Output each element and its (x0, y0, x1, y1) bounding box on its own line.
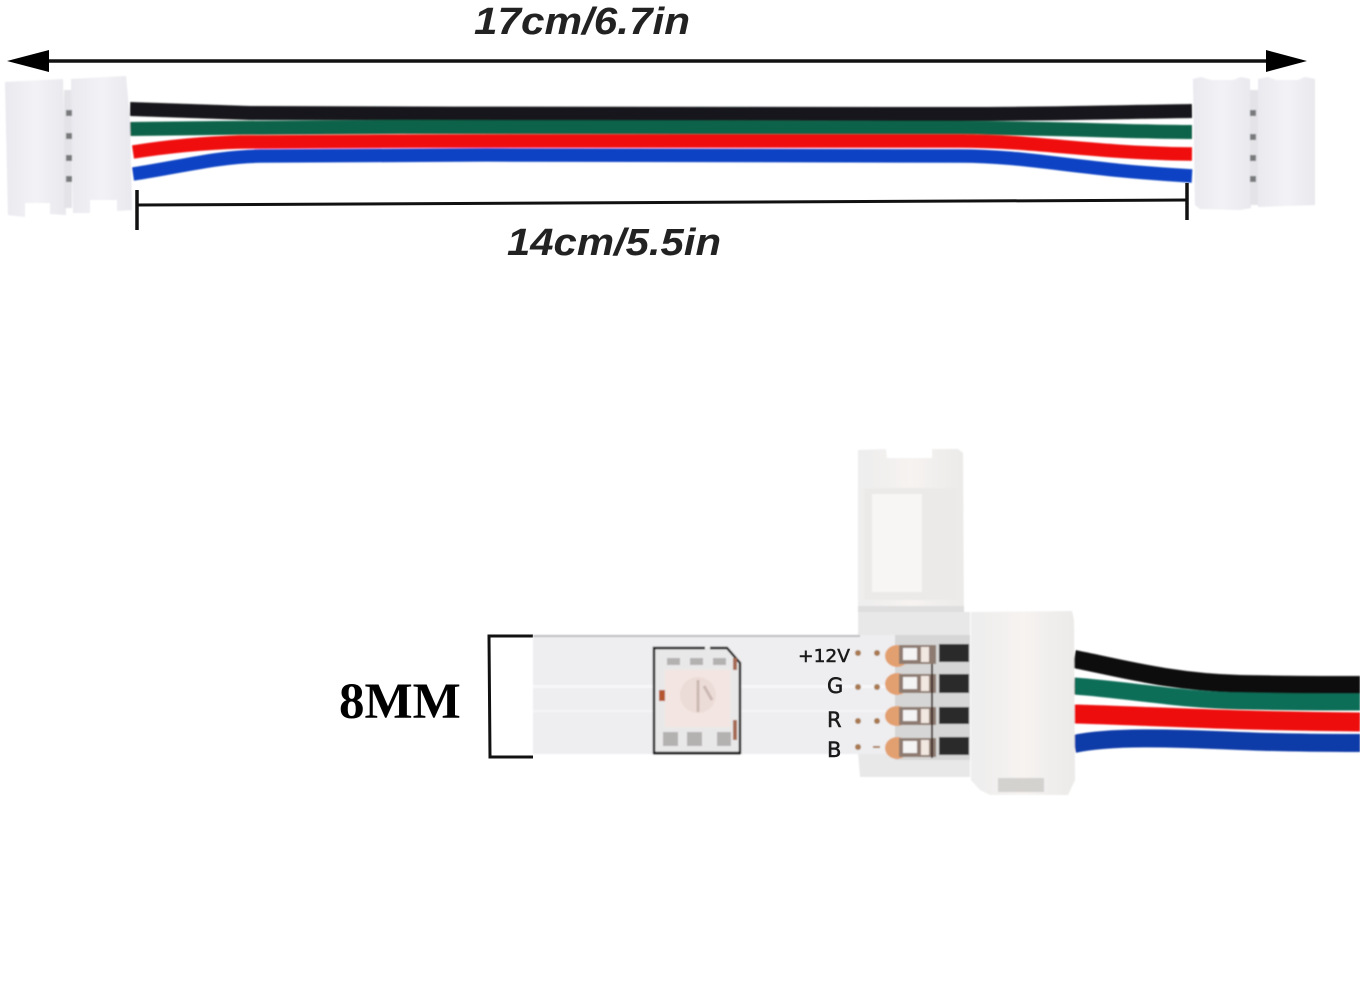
wire: black (1074, 659, 1360, 685)
LED chip (654, 648, 740, 753)
label: strip width: 8MM (339, 674, 461, 730)
wire: red (1074, 714, 1360, 722)
pad: B (885, 737, 969, 759)
extension cable (5, 76, 1315, 217)
right clip connector (1193, 77, 1315, 210)
wire length dimension line (137, 183, 1187, 230)
pad: G (885, 673, 969, 695)
lower T body (858, 612, 970, 777)
wire housing clip (971, 611, 1075, 795)
contact window (895, 635, 970, 760)
T connector assembly (533, 449, 1360, 795)
upper T branch clip (858, 449, 964, 640)
left clip connector (5, 76, 132, 217)
label: G: G (827, 674, 843, 698)
wire: green (130, 127, 1192, 132)
label: B: B (827, 738, 841, 762)
pad labels (798, 646, 851, 762)
overall length arrow (7, 50, 1307, 72)
wire: green (1074, 686, 1360, 702)
copper pads and pins (885, 644, 969, 759)
label: overall length: 17cm/6.7in (474, 1, 690, 43)
label: +12V: +12V (798, 646, 851, 667)
output wires (1074, 659, 1360, 744)
pad: R (885, 706, 969, 726)
LED strip (533, 635, 895, 754)
wire: black (130, 109, 1192, 114)
width bracket (489, 636, 533, 757)
label: R: R (827, 708, 842, 732)
wire: red (133, 141, 1192, 154)
label: wire length: 14cm/5.5in (507, 222, 721, 264)
pad: +12V (885, 644, 969, 667)
solder dots (855, 650, 880, 750)
wire: blue (133, 155, 1192, 176)
wire: blue (1074, 738, 1360, 744)
